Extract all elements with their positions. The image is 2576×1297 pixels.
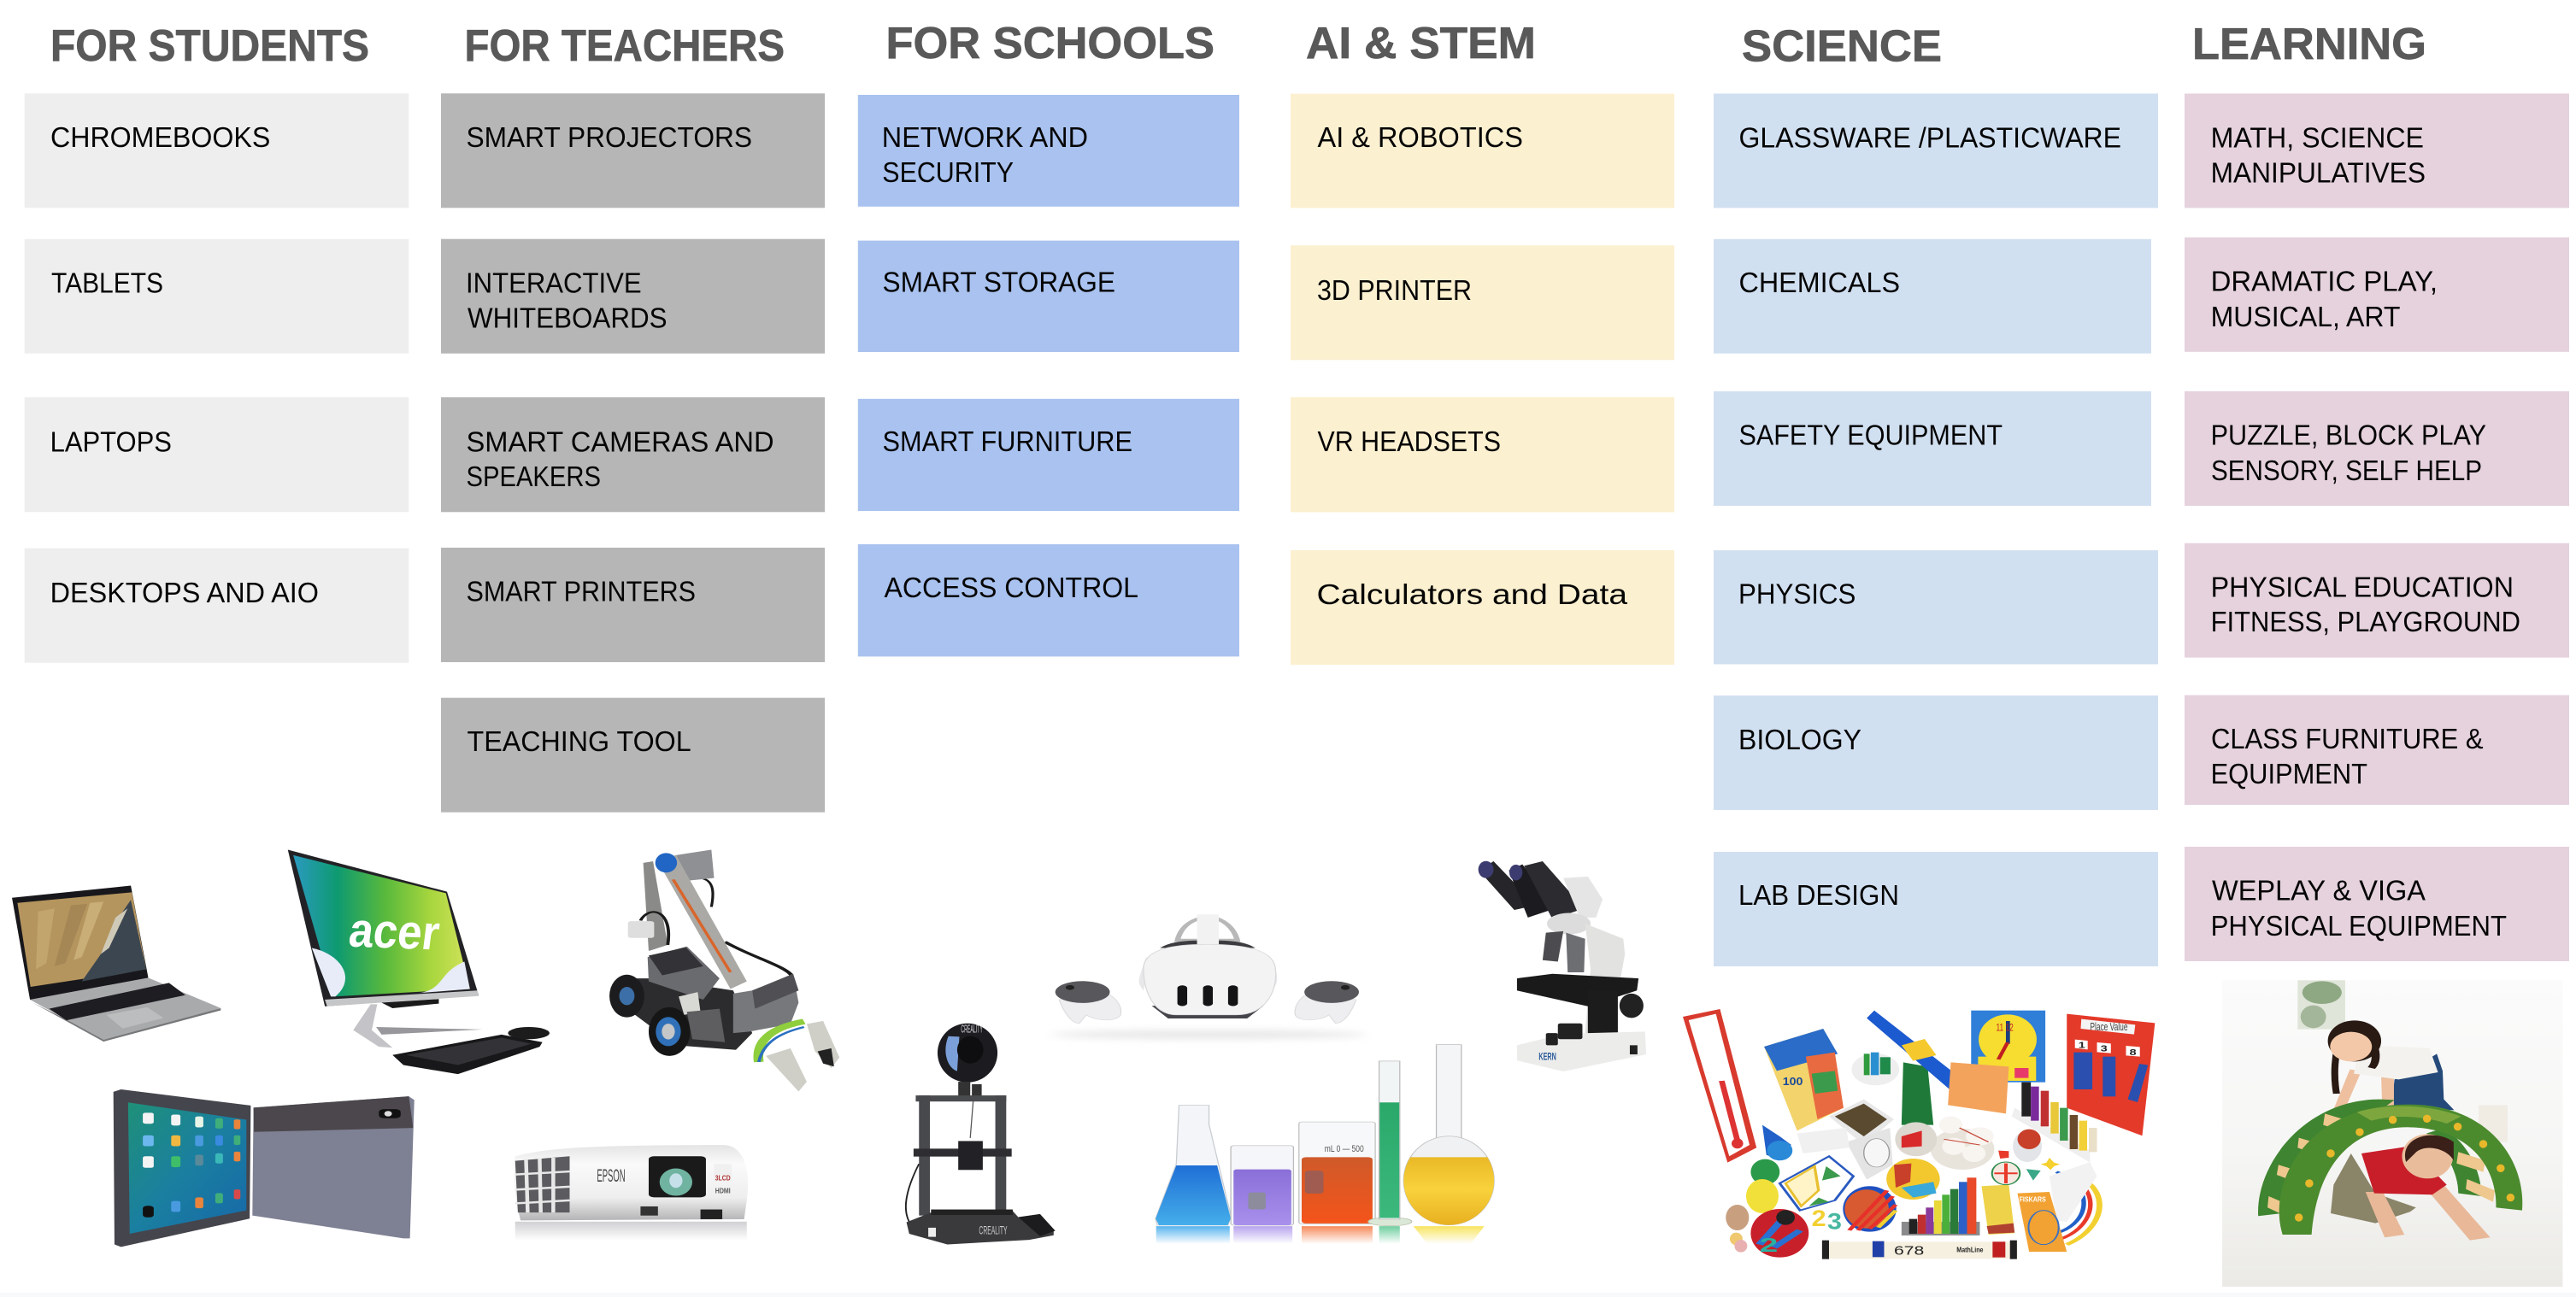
place value pocket chart: 3 xyxy=(2101,1044,2108,1053)
image: math and science manipulatives xyxy=(1683,1009,2155,1259)
card: desktops and aio xyxy=(25,549,409,663)
heading: ai and stem: AI & STEM xyxy=(1306,19,1536,68)
boy xyxy=(2331,1134,2491,1241)
thermometer chart xyxy=(1683,1009,1756,1163)
card: teaching tool xyxy=(441,698,825,813)
heading: science: SCIENCE xyxy=(1742,22,1942,72)
card: class furniture xyxy=(2185,695,2569,805)
card: chromebooks: CHROMEBOOKS xyxy=(50,121,270,153)
card: smart projectors: SMART PROJECTORS xyxy=(467,121,752,153)
mini spinner star and triangle xyxy=(1992,1130,2060,1185)
card: class furniture: CLASS FURNITURE & xyxy=(2211,723,2484,754)
card: vr headsets: VR HEADSETS xyxy=(1318,425,1501,457)
card: weplay and viga: WEPLAY & VIGA xyxy=(2212,875,2426,907)
card: smart cameras and speakers: SMART CAMERAS AND xyxy=(467,426,774,458)
image: android tablet xyxy=(114,1089,415,1247)
conical flask xyxy=(1156,1105,1231,1225)
card: safety equipment xyxy=(1714,391,2151,506)
image: vr headset and controllers xyxy=(1051,914,1367,1039)
card: smart printers xyxy=(441,548,825,662)
animal counters tray xyxy=(1797,1128,1850,1153)
card: access control xyxy=(858,544,1239,656)
place value pocket chart: 8 xyxy=(2130,1048,2137,1057)
card: 3d printer xyxy=(1291,245,1674,360)
card: 3d printer: 3D PRINTER xyxy=(1317,274,1472,306)
round bottom flask xyxy=(1403,1045,1494,1225)
protractor pack xyxy=(2018,1192,2067,1252)
number magnets: 2 xyxy=(1812,1206,1826,1231)
card: physical education xyxy=(2185,543,2569,658)
counting rods xyxy=(2012,1083,2097,1163)
card: dramatic play xyxy=(2185,238,2569,352)
heading: for students: FOR STUDENTS xyxy=(50,21,369,71)
column: for schools xyxy=(858,19,1239,656)
image: creality 3d printer xyxy=(906,1023,1056,1244)
place value pocket chart xyxy=(2067,1014,2155,1136)
large beaker xyxy=(1299,1122,1375,1224)
card: biology: BIOLOGY xyxy=(1738,724,1861,755)
card: network and security: NETWORK AND xyxy=(882,121,1088,153)
product images: right group xyxy=(1683,980,2562,1287)
balance scale xyxy=(1851,1011,1977,1125)
product images: left group xyxy=(12,850,839,1247)
card: lab design: LAB DESIGN xyxy=(1738,879,1899,911)
card: smart furniture: SMART FURNITURE xyxy=(882,425,1132,457)
product images: centre group xyxy=(906,861,1646,1244)
card: calculators and data xyxy=(1291,550,1674,665)
image: epson projector: 3LCD xyxy=(715,1174,731,1183)
image: acer all-in-one desktop: acer xyxy=(346,902,443,960)
number chart xyxy=(1948,1062,2008,1113)
image: creality 3d printer: CREALITY xyxy=(979,1224,1008,1237)
card: math science manipulatives: MATH, SCIENCE xyxy=(2211,122,2424,154)
card: physics xyxy=(1714,550,2158,665)
graduated cylinder xyxy=(1368,1061,1412,1226)
image: acer all-in-one desktop xyxy=(288,850,550,1074)
back arch xyxy=(2258,1100,2481,1216)
card: smart storage: SMART STORAGE xyxy=(882,267,1115,297)
front arch xyxy=(2279,1105,2522,1235)
card: ai and robotics xyxy=(1291,94,1674,208)
card: math science manipulatives xyxy=(2185,94,2569,208)
card: desktops and aio: DESKTOPS AND AIO xyxy=(50,577,319,608)
baseball basket xyxy=(1931,1117,1994,1170)
yellow plate xyxy=(1886,1159,1940,1200)
image: creality 3d printer: CREALITY xyxy=(961,1023,983,1035)
card: weplay and viga xyxy=(2185,847,2569,961)
card: tablets xyxy=(25,239,409,354)
card: glassware: GLASSWARE /PLASTICWARE xyxy=(1738,122,2121,154)
card: smart projectors xyxy=(441,93,825,208)
place value pocket chart: Place Value xyxy=(2090,1020,2127,1033)
bottom edge strip xyxy=(0,1293,2576,1297)
image: children on weplay arch xyxy=(2222,980,2562,1287)
card: tablets: TABLETS xyxy=(51,267,163,298)
card: smart cameras and speakers: SPEAKERS xyxy=(467,461,601,492)
math line abacus: MathLine xyxy=(1956,1245,1984,1253)
wooden blocks box xyxy=(1764,1029,1844,1130)
plant xyxy=(2297,980,2345,1030)
card: puzzle and block play: SENSORY, SELF HELP xyxy=(2211,455,2482,486)
image: kern microscope xyxy=(1479,861,1646,1071)
heading: for teachers: FOR TEACHERS xyxy=(465,21,785,71)
image: chromebook laptop xyxy=(12,886,221,1042)
red plate with shapes xyxy=(1750,1209,1808,1258)
image: vex robot kit xyxy=(609,850,839,1091)
globe spinner xyxy=(1895,1122,1937,1156)
card: network and security: SECURITY xyxy=(882,156,1014,188)
red plate with shapes: 2 xyxy=(1760,1234,1778,1256)
card: chemicals xyxy=(1714,239,2151,354)
card: lab design xyxy=(1714,852,2158,966)
heading: learning: LEARNING xyxy=(2192,20,2426,69)
math line abacus: 678 xyxy=(1894,1243,1924,1257)
column: for teachers xyxy=(441,21,825,813)
teaching clock xyxy=(1971,1011,2045,1083)
protractor pack: FISKARS xyxy=(2020,1195,2046,1204)
card: physical education: PHYSICAL EDUCATION xyxy=(2211,572,2514,603)
card: calculators and data: Calculators and Data xyxy=(1316,578,1628,610)
rungs xyxy=(2267,1113,2495,1216)
card: chromebooks xyxy=(25,93,409,208)
card: smart storage xyxy=(858,241,1239,352)
card: network and security xyxy=(858,95,1239,207)
card: chemicals: CHEMICALS xyxy=(1738,267,1900,298)
card: dramatic play: MUSICAL, ART xyxy=(2211,301,2400,332)
card: interactive whiteboards: WHITEBOARDS xyxy=(468,302,668,333)
wooden blocks box: 100 xyxy=(1783,1075,1803,1088)
card: puzzle and block play: PUZZLE, BLOCK PLAY xyxy=(2211,419,2486,451)
blue plate with sticks xyxy=(1843,1186,1897,1232)
card: biology xyxy=(1714,695,2158,810)
teaching clock: 11 12 xyxy=(1996,1023,2014,1034)
tray scale xyxy=(1829,1100,1894,1180)
card: physical education: FITNESS, PLAYGROUND xyxy=(2211,606,2520,637)
place value pocket chart: 1 xyxy=(2079,1041,2085,1050)
card: laptops: LAPTOPS xyxy=(50,426,172,458)
heading: for schools: FOR SCHOOLS xyxy=(885,19,1214,68)
image: epson projector xyxy=(514,1145,748,1241)
card: math science manipulatives: MANIPULATIVES xyxy=(2211,157,2426,188)
card: ai and robotics: AI & ROBOTICS xyxy=(1318,121,1523,153)
card: dramatic play: DRAMATIC PLAY, xyxy=(2211,266,2438,297)
column: ai and stem xyxy=(1291,19,1674,665)
large beaker: mL 0 — 500 xyxy=(1325,1144,1364,1154)
card: smart printers: SMART PRINTERS xyxy=(467,575,696,607)
card: smart cameras and speakers xyxy=(441,397,825,512)
girl xyxy=(2328,1020,2455,1122)
card: access control: ACCESS CONTROL xyxy=(884,572,1138,603)
math line abacus xyxy=(1822,1241,2018,1259)
rulers and coloured plates xyxy=(2050,1162,2099,1245)
image: laboratory glassware xyxy=(1156,1045,1494,1244)
card: weplay and viga: PHYSICAL EQUIPMENT xyxy=(2211,910,2507,942)
card: vr headsets xyxy=(1291,397,1674,513)
small beaker xyxy=(1231,1146,1293,1225)
column: science xyxy=(1714,22,2158,966)
pattern block frame xyxy=(1779,1156,1854,1211)
tablet app icons xyxy=(143,1112,240,1218)
number rods stairs xyxy=(1902,1177,1979,1235)
card: laptops xyxy=(25,397,409,512)
card: class furniture: EQUIPMENT xyxy=(2211,758,2367,789)
card: safety equipment: SAFETY EQUIPMENT xyxy=(1738,419,2003,451)
card: smart furniture xyxy=(858,399,1239,511)
number magnets: 3 xyxy=(1827,1209,1842,1235)
card: interactive whiteboards xyxy=(441,239,825,354)
card: interactive whiteboards: INTERACTIVE xyxy=(466,267,642,298)
card: teaching tool: TEACHING TOOL xyxy=(467,725,691,757)
card: puzzle and block play xyxy=(2185,391,2569,506)
image: epson projector: HDMI xyxy=(715,1187,731,1194)
pack of sticks xyxy=(1981,1185,2014,1235)
column: learning xyxy=(2185,20,2569,961)
card: glassware xyxy=(1714,94,2158,208)
card: physics: PHYSICS xyxy=(1738,578,1856,609)
image: epson projector: EPSON xyxy=(597,1165,626,1186)
column: for students xyxy=(25,21,409,663)
counters and small pieces xyxy=(1726,1125,1792,1253)
image: kern microscope: KERN xyxy=(1538,1050,1556,1062)
